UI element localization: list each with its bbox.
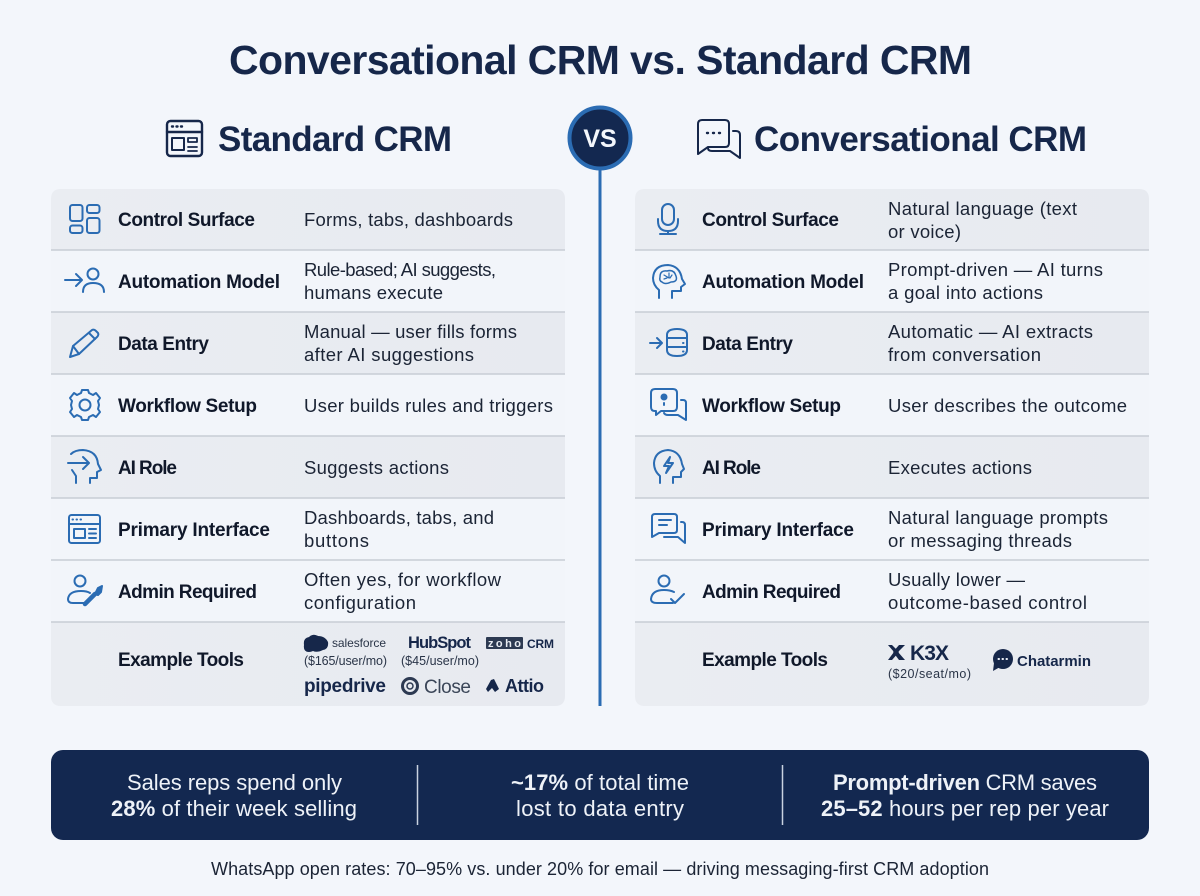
row: Primary Interface: Primary Interface [702,520,854,541]
row: AI Role [68,450,449,483]
logo: K3X: ($20/seat/mo) [888,667,971,681]
logo: Close: Close [424,677,471,698]
logo: K3X [888,642,971,681]
heading: Conversational CRM: Conversational CRM [754,120,1087,159]
logo: Zoho CRM: CRM [527,637,554,651]
VS badge [570,108,630,168]
row: Workflow Setup [70,390,553,420]
logo: HubSpot: ($45/user/mo) [401,654,479,668]
row: Admin Required: Admin Required [702,582,841,603]
VS badge: VS [583,125,617,153]
row: Primary Interface: Natural language prompts [888,507,1108,528]
row: Admin Required [651,569,1087,613]
icon: chat with lightbulb [651,389,686,420]
row: Control Surface: Control Surface [702,210,839,231]
footer note: WhatsApp open rates: 70–95% vs. under 20% for email — driving messaging-first CRM adoption [211,859,989,879]
row: AI Role: Executes actions [888,457,1032,478]
icon: arrow to database [650,329,687,356]
icon: browser window [69,515,100,543]
row: AI Role: AI Role [118,458,177,479]
row: Admin Required: Often yes, for workflow [304,569,502,590]
icon: arrow to person [65,268,104,292]
stat: selling time: Sales reps spend only [127,770,342,795]
logo: Zoho CRM [486,637,554,651]
icon: dashboard window [167,121,202,156]
row: AI Role: Suggests actions [304,457,449,478]
row: Data Entry: Automatic — AI extracts [888,321,1093,342]
row: Automation Model [65,259,496,303]
stat: hours saved: 25–52 hours per rep per year [821,796,1109,821]
row: Admin Required [68,569,502,613]
row: Data Entry [650,321,1093,365]
row: Workflow Setup: Workflow Setup [702,396,841,417]
center divider line [598,168,602,706]
stat: hours saved [821,770,1109,821]
row: Admin Required: configuration [304,592,416,613]
row: Example Tools: Example Tools [118,650,244,671]
stat: hours saved: Prompt-driven CRM saves [833,770,1097,795]
row: Automation Model: Prompt-driven — AI turns [888,259,1103,280]
icon: person with wrench [68,576,102,604]
logo: Close [402,677,471,698]
row: Control Surface: Control Surface [118,210,255,231]
logo: Attio: Attio [505,676,544,696]
row: Primary Interface: Dashboards, tabs, and [304,507,494,528]
row: Control Surface [658,198,1077,242]
row: Control Surface: or voice) [888,221,961,242]
logo: Zoho CRM: zoho [488,638,521,650]
row: Data Entry: Manual — user fills forms [304,321,517,342]
row: Control Surface [70,205,513,233]
stat: data entry: lost to data entry [516,796,684,821]
row: Control Surface: Forms, tabs, dashboards [304,209,513,230]
title: Conversational CRM vs. Standard CRM [229,37,972,83]
icon: head with bolt [654,450,684,483]
row: Automation Model: Automation Model [702,272,864,293]
row: Workflow Setup: Workflow Setup [118,396,257,417]
row: Automation Model: a goal into actions [888,282,1043,303]
panel: Standard CRM [51,189,565,706]
row: Automation Model: Rule-based; AI suggests, [304,259,496,280]
icon: dashboard tiles [70,205,100,233]
icon: person with check [651,576,684,603]
row: Data Entry [70,321,517,365]
row: Data Entry: after AI suggestions [304,344,474,365]
icon: head with brain [653,265,685,298]
logo: HubSpot [401,634,479,668]
row: Example Tools [702,642,1091,681]
row: Admin Required: outcome-based control [888,592,1087,613]
heading: Standard CRM: Standard CRM [218,120,452,159]
row: Automation Model: humans execute [304,282,443,303]
row: AI Role: AI Role [702,458,761,479]
row: Admin Required: Usually lower — [888,569,1026,590]
row: Primary Interface [652,507,1108,551]
icon: message bubbles [652,514,685,543]
row: Workflow Setup: User describes the outcome [888,395,1127,416]
logo: Attio [486,676,544,696]
row: Automation Model: Automation Model [118,272,280,293]
row: Workflow Setup: User builds rules and triggers [304,395,553,416]
logo: Salesforce: ($165/user/mo) [304,654,387,668]
stat: data entry: ~17% of total time [511,770,689,795]
icon: microphone [658,204,678,234]
logo: HubSpot: HubSpot [408,634,472,652]
stat: selling time [111,770,357,821]
row: Data Entry: Data Entry [118,334,209,355]
row: Example Tools: Example Tools [702,650,828,671]
stat: selling time: 28% of their week selling [111,796,357,821]
stats banner [51,750,1149,840]
icon: chat bubbles [698,120,740,158]
row: Data Entry: from conversation [888,344,1041,365]
logo: Chatarmin [993,649,1091,671]
row: Primary Interface: or messaging threads [888,530,1072,551]
logo: Salesforce: salesforce [332,636,386,650]
row: Workflow Setup [651,389,1127,420]
stat: data entry [511,770,689,821]
logo: Salesforce [304,635,387,668]
row: Automation Model [653,259,1103,303]
row: Primary Interface [69,507,494,551]
row: AI Role [654,450,1032,483]
row: Primary Interface: Primary Interface [118,520,270,541]
panel: Conversational CRM [635,189,1149,706]
row: Primary Interface: buttons [304,530,369,551]
icon: head with arrow [68,450,101,483]
logo: Chatarmin: Chatarmin [1017,653,1091,670]
icon: gear [70,390,100,420]
row: Control Surface: Natural language (text [888,198,1077,219]
logo: Pipedrive: pipedrive [304,676,386,697]
row: Data Entry: Data Entry [702,334,793,355]
icon: pencil [70,330,98,357]
row: Admin Required: Admin Required [118,582,257,603]
logo: K3X: K3X [910,642,949,665]
row: Example Tools [118,634,554,698]
